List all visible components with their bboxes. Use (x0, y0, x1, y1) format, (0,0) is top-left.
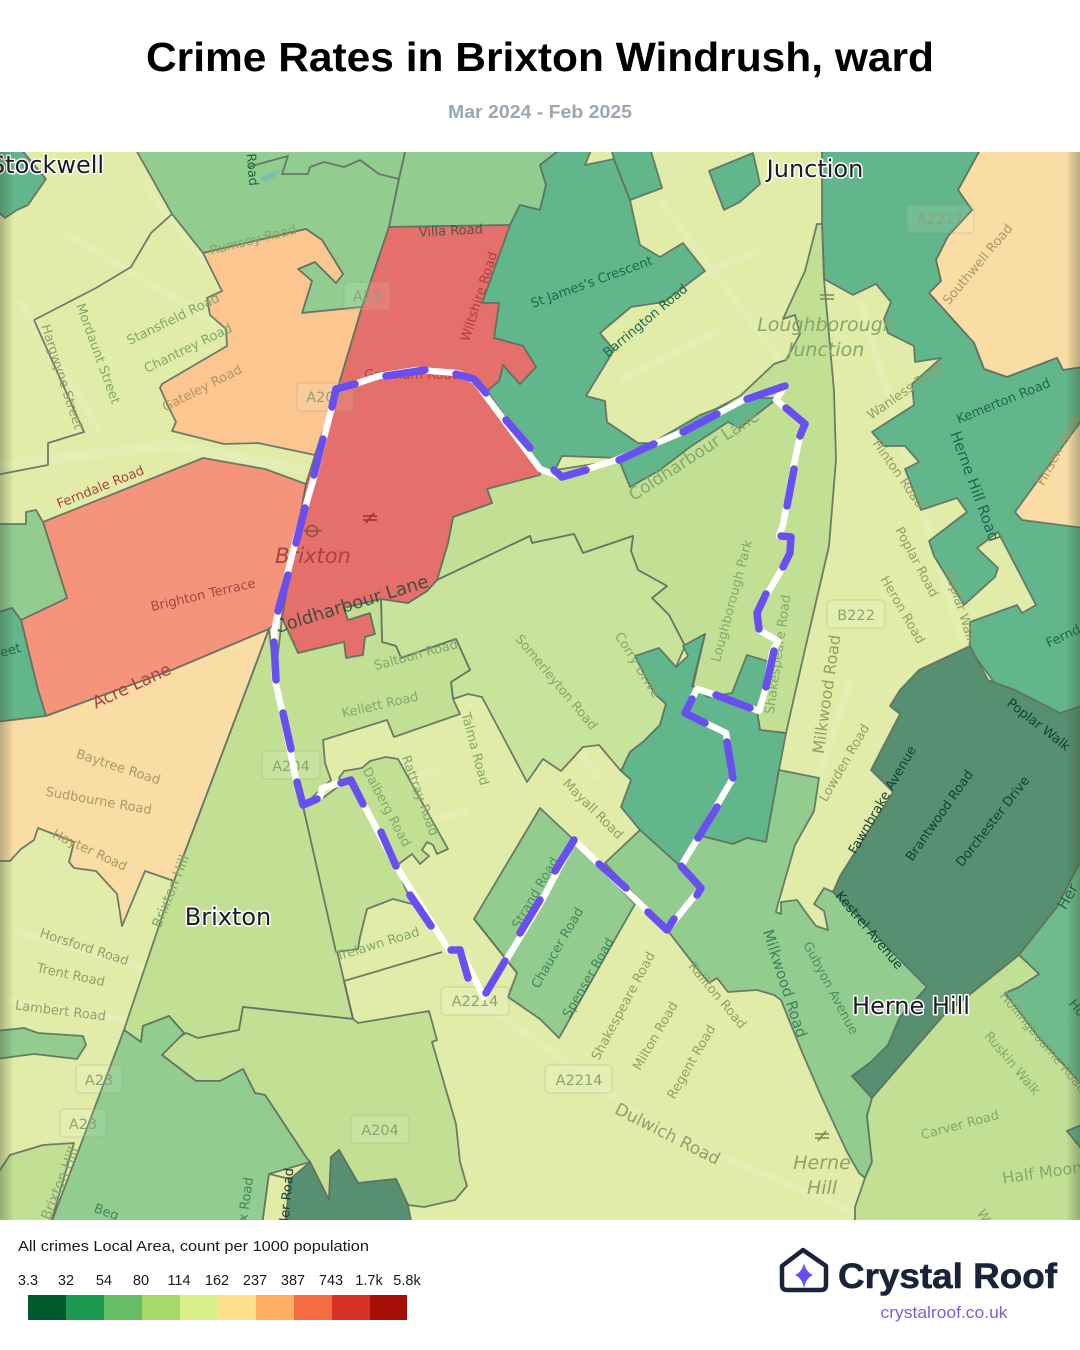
place names: Junction (765, 155, 863, 183)
road labels: Dorchester Drive (953, 774, 1033, 870)
legend scale values (18, 1273, 421, 1289)
road labels: Hinton Road (869, 437, 927, 511)
zone: south-west mid (0, 1143, 74, 1226)
zone: large teal St James's (482, 148, 705, 470)
road labels: Kellett Road (341, 690, 420, 722)
road labels: Coldharbour Lane (625, 406, 763, 505)
zone: dark bottom (285, 1150, 412, 1226)
zone: teal top centre (709, 153, 760, 210)
road labels: Coldharbour Lane (272, 571, 431, 638)
road shields: B222 (837, 608, 875, 624)
road labels: Milkwood Road (759, 927, 811, 1040)
road labels: Barrington Road (601, 282, 691, 361)
road labels: Herne Hill Road (946, 429, 1003, 544)
legend colour bar (28, 1295, 407, 1320)
legend scale values: 32 (58, 1273, 74, 1289)
zone: large mid green Coldharbour (437, 224, 836, 733)
road labels: St James's Crescent (529, 254, 655, 312)
zone: A204 lower centre (162, 1007, 467, 1207)
road labels: Kestrel Avenue (832, 889, 906, 973)
zone: right teal (822, 148, 1080, 715)
pond (260, 170, 282, 182)
road labels: W (973, 1207, 993, 1226)
road shields: A23 (85, 1073, 113, 1089)
road labels: Dalberg Road (359, 765, 413, 850)
road labels: Mayall Road (559, 776, 626, 843)
road labels: Hayter Road (50, 827, 129, 875)
road labels: Kemerton Road (955, 376, 1053, 427)
road shields: A204 (361, 1123, 399, 1139)
zone: Stockwell corner (0, 148, 46, 218)
road labels: Mordaunt Street (72, 302, 122, 406)
zone: west salmon (21, 458, 306, 716)
zone: north-west medium green (135, 148, 406, 313)
website url: crystalroof.co.uk (880, 1304, 1008, 1322)
choropleth map (0, 148, 1080, 1226)
road labels: Hargwyne Street (37, 323, 85, 431)
road labels: Railton Road (685, 960, 749, 1032)
zone: east teal (1005, 855, 1080, 1087)
road labels: Gubyon Avenue (799, 939, 861, 1037)
title: Crime Rates in Brixton Windrush, ward (146, 34, 934, 80)
road labels: Junction (784, 339, 864, 361)
road labels: Poplar Road (891, 525, 941, 600)
zone: central teal (621, 634, 786, 866)
road labels: Acre Lane (89, 660, 174, 713)
zone: north green notched line (248, 156, 517, 973)
zone: orange Gateley (160, 229, 362, 455)
place names: Brixton (185, 903, 271, 931)
road labels: Ferndale Road (55, 463, 146, 512)
road shields: A2217 (917, 212, 963, 228)
zone: Chaucer Road (474, 808, 635, 1038)
road shields: A204 (272, 759, 310, 775)
road labels: Milton Road (630, 999, 682, 1073)
road labels: Talma Road (457, 710, 491, 787)
road labels: Stansfield Road (125, 291, 222, 349)
road labels: Sudbourne Road (44, 785, 153, 818)
road labels: Baytree Road (74, 747, 162, 788)
road labels: Lambert Road (14, 999, 107, 1025)
road labels: Loughborough (757, 314, 895, 336)
zone: red Brixton centre (282, 225, 540, 658)
road labels: Poplar Walk (941, 570, 979, 647)
road labels (0, 153, 1080, 1226)
road labels: Chaucer Road (529, 905, 587, 991)
road labels: Brixton Hill (38, 1145, 82, 1222)
road labels: ler Road (278, 1167, 297, 1222)
legend (18, 1239, 421, 1320)
zone: top-right peach (929, 148, 1080, 377)
zone: Somerleyton (381, 534, 685, 782)
zone: teal Coldharbour strip (619, 398, 778, 487)
ward boundary: Brixton Windrush (274, 370, 805, 997)
road labels: Corry Drive (611, 630, 663, 700)
logo wordmark: Crystal Roof (838, 1257, 1057, 1296)
road labels: Horsford Road (38, 926, 130, 969)
zone: dark Brantwood (833, 646, 1080, 1098)
legend title: All crimes Local Area, count per 1000 population (18, 1239, 369, 1255)
road labels: Brighton Terrace (149, 576, 257, 615)
zone: small pale box (262, 1174, 290, 1226)
road labels: Heron Road (877, 574, 927, 647)
road labels: Shakespeare Road (589, 950, 659, 1063)
faint street network (3, 178, 967, 1216)
zone: strip west of salmon (0, 608, 46, 722)
road labels: x Road (236, 1176, 257, 1223)
zone: Trelawn west (303, 780, 412, 952)
road labels: Herne (793, 1152, 851, 1174)
legend scale values: 114 (167, 1273, 191, 1289)
legend scale values: 80 (133, 1273, 149, 1289)
road shields: A23 (69, 1117, 97, 1133)
road labels: Villa Road (418, 222, 483, 241)
map edge shading (0, 152, 1080, 1220)
road labels: Southwell Road (940, 221, 1016, 308)
road labels: Brantwood Road (903, 768, 977, 864)
road labels: Poplar Walk (1004, 696, 1073, 755)
road labels: Trelawn Road (334, 925, 421, 965)
legend scale values: 387 (281, 1273, 305, 1289)
legend scale values: 1.7k (355, 1273, 383, 1289)
road shields: A2214 (556, 1073, 602, 1089)
place names: Herne Hill (852, 992, 970, 1020)
zone: western strip (0, 510, 67, 620)
road shields: A2214 (452, 994, 498, 1010)
road labels: Rattray Road (398, 753, 441, 838)
zone: Kellett Road (275, 599, 470, 806)
road labels: Somerleyton Road (512, 632, 600, 733)
legend scale values: 743 (319, 1273, 343, 1289)
zone: Dalberg Road (339, 757, 448, 866)
road shields (60, 205, 974, 1143)
place names (0, 151, 970, 1020)
zone: Trelawn line (344, 952, 442, 1019)
zone: lower-left medium green (50, 1016, 310, 1226)
zone: small west medium (0, 1028, 86, 1059)
road labels: Trent Road (34, 961, 106, 990)
road labels: Carver Road (919, 1108, 1001, 1143)
road labels: Rumsey Road (208, 223, 298, 259)
road labels: Dulwich Road (611, 1099, 723, 1170)
road labels: Wanless Road (865, 359, 947, 423)
legend scale values: 237 (243, 1273, 267, 1289)
road labels: Strand Road (509, 855, 562, 932)
road labels: Lowden Road (817, 722, 873, 805)
road shields: A23 (353, 289, 381, 305)
zone: Gubyon medium green (605, 770, 927, 1178)
road labels: Ruskin Walk (981, 1029, 1043, 1099)
road shields: A203 (306, 390, 344, 406)
legend scale values: 162 (205, 1273, 229, 1289)
zone: Villa Road north (389, 148, 562, 227)
zone: south-east mid (855, 955, 1080, 1226)
zone: Brixton Hill mid green (124, 629, 353, 1042)
road labels: Hill (807, 1177, 838, 1199)
logo: Crystal Roof (782, 1250, 1057, 1322)
road labels: Brixton Hill (149, 853, 193, 930)
road labels: Beg (92, 1201, 121, 1224)
road labels: Brixton (275, 544, 351, 568)
road labels: Road (243, 153, 260, 187)
road labels: Milkwood Road (809, 633, 844, 755)
road labels: Wiltshire Road (458, 250, 501, 344)
road labels: Gresham Road (364, 368, 460, 383)
station symbols (304, 295, 834, 1141)
icon: house with star (782, 1250, 826, 1290)
road labels: Spenser Road (560, 936, 618, 1021)
subtitle: date range: Mar 2024 - Feb 2025 (448, 102, 632, 122)
legend scale values: 5.8k (393, 1273, 421, 1289)
road labels: Gateley Road (160, 362, 245, 415)
zone: Baytree peach (0, 629, 269, 926)
legend scale values: 3.3 (18, 1273, 38, 1289)
zone: far east teal sliver (1067, 1124, 1080, 1152)
road labels: Chantrey Road (142, 321, 235, 377)
legend scale values: 54 (96, 1273, 112, 1289)
zone: Loughborough left boundary line (0, 214, 172, 475)
road labels: Regent Road (665, 1023, 719, 1102)
road labels: Loughborough Park (709, 538, 756, 664)
road labels: Shakespeare Road (763, 594, 794, 715)
road labels: Saltoun Road (373, 637, 460, 674)
zone: second peach (1015, 417, 1080, 528)
zone: teal tooth (611, 148, 662, 200)
road labels: Fawnbrake Avenue (846, 744, 920, 857)
